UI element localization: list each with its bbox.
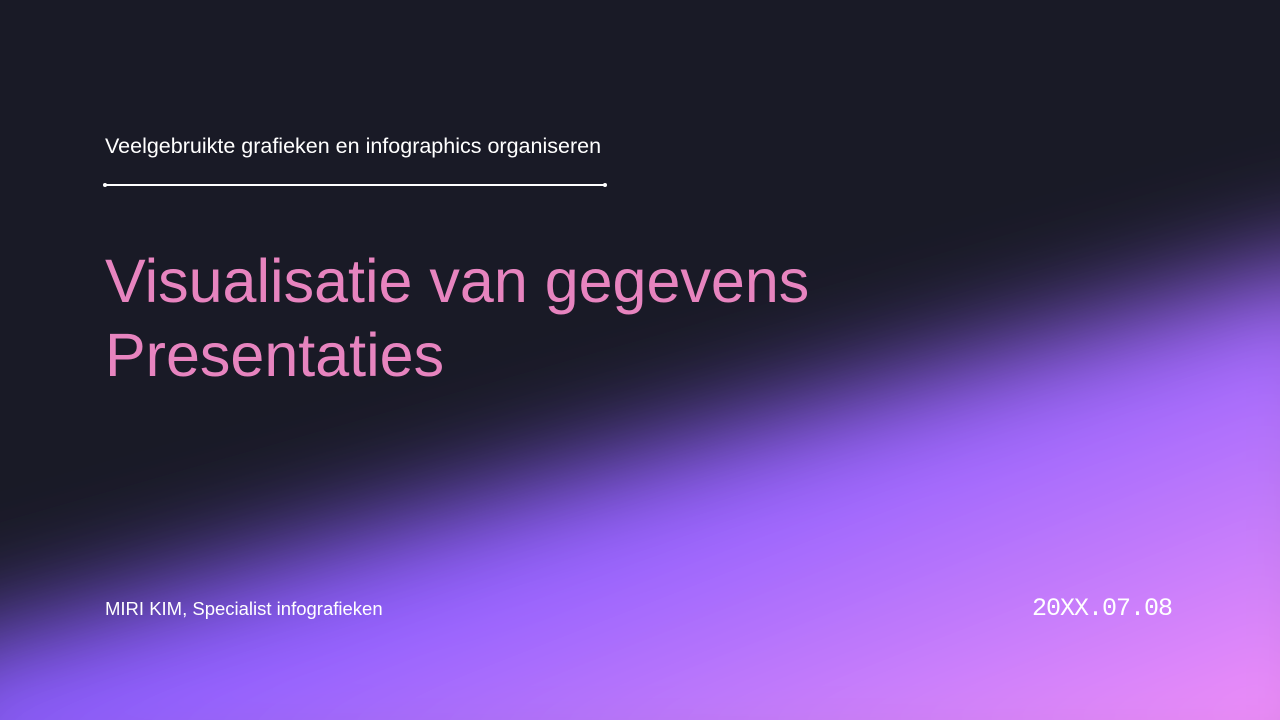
main title: Presentaties — [105, 321, 444, 389]
main title — [105, 247, 809, 389]
subtitle: Veelgebruikte grafieken en infographics organiseren — [105, 134, 601, 158]
divider line with dots — [103, 183, 607, 187]
author: MIRI KIM, Specialist infografieken — [105, 598, 383, 619]
main title: Visualisatie van gegevens — [105, 247, 809, 315]
date: 20XX.07.08 — [1032, 594, 1172, 623]
